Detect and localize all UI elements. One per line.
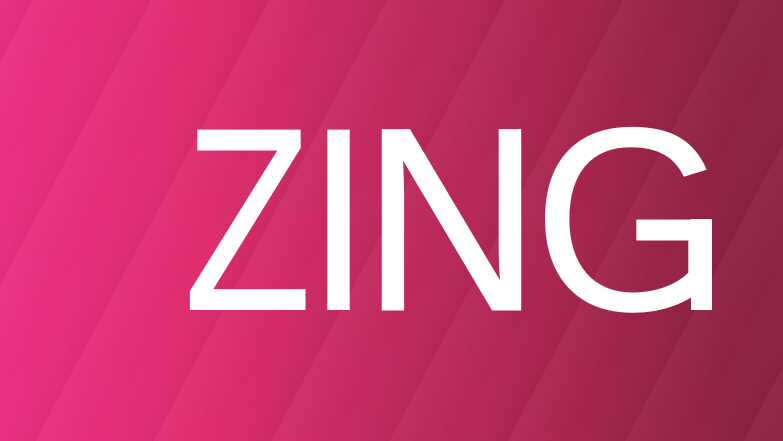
title: ZING	[184, 73, 729, 366]
title: ZING: Z	[184, 75, 312, 366]
title: ZING: I	[306, 74, 371, 366]
title: ZING: N	[362, 73, 540, 365]
title: ZING: G	[532, 73, 729, 366]
